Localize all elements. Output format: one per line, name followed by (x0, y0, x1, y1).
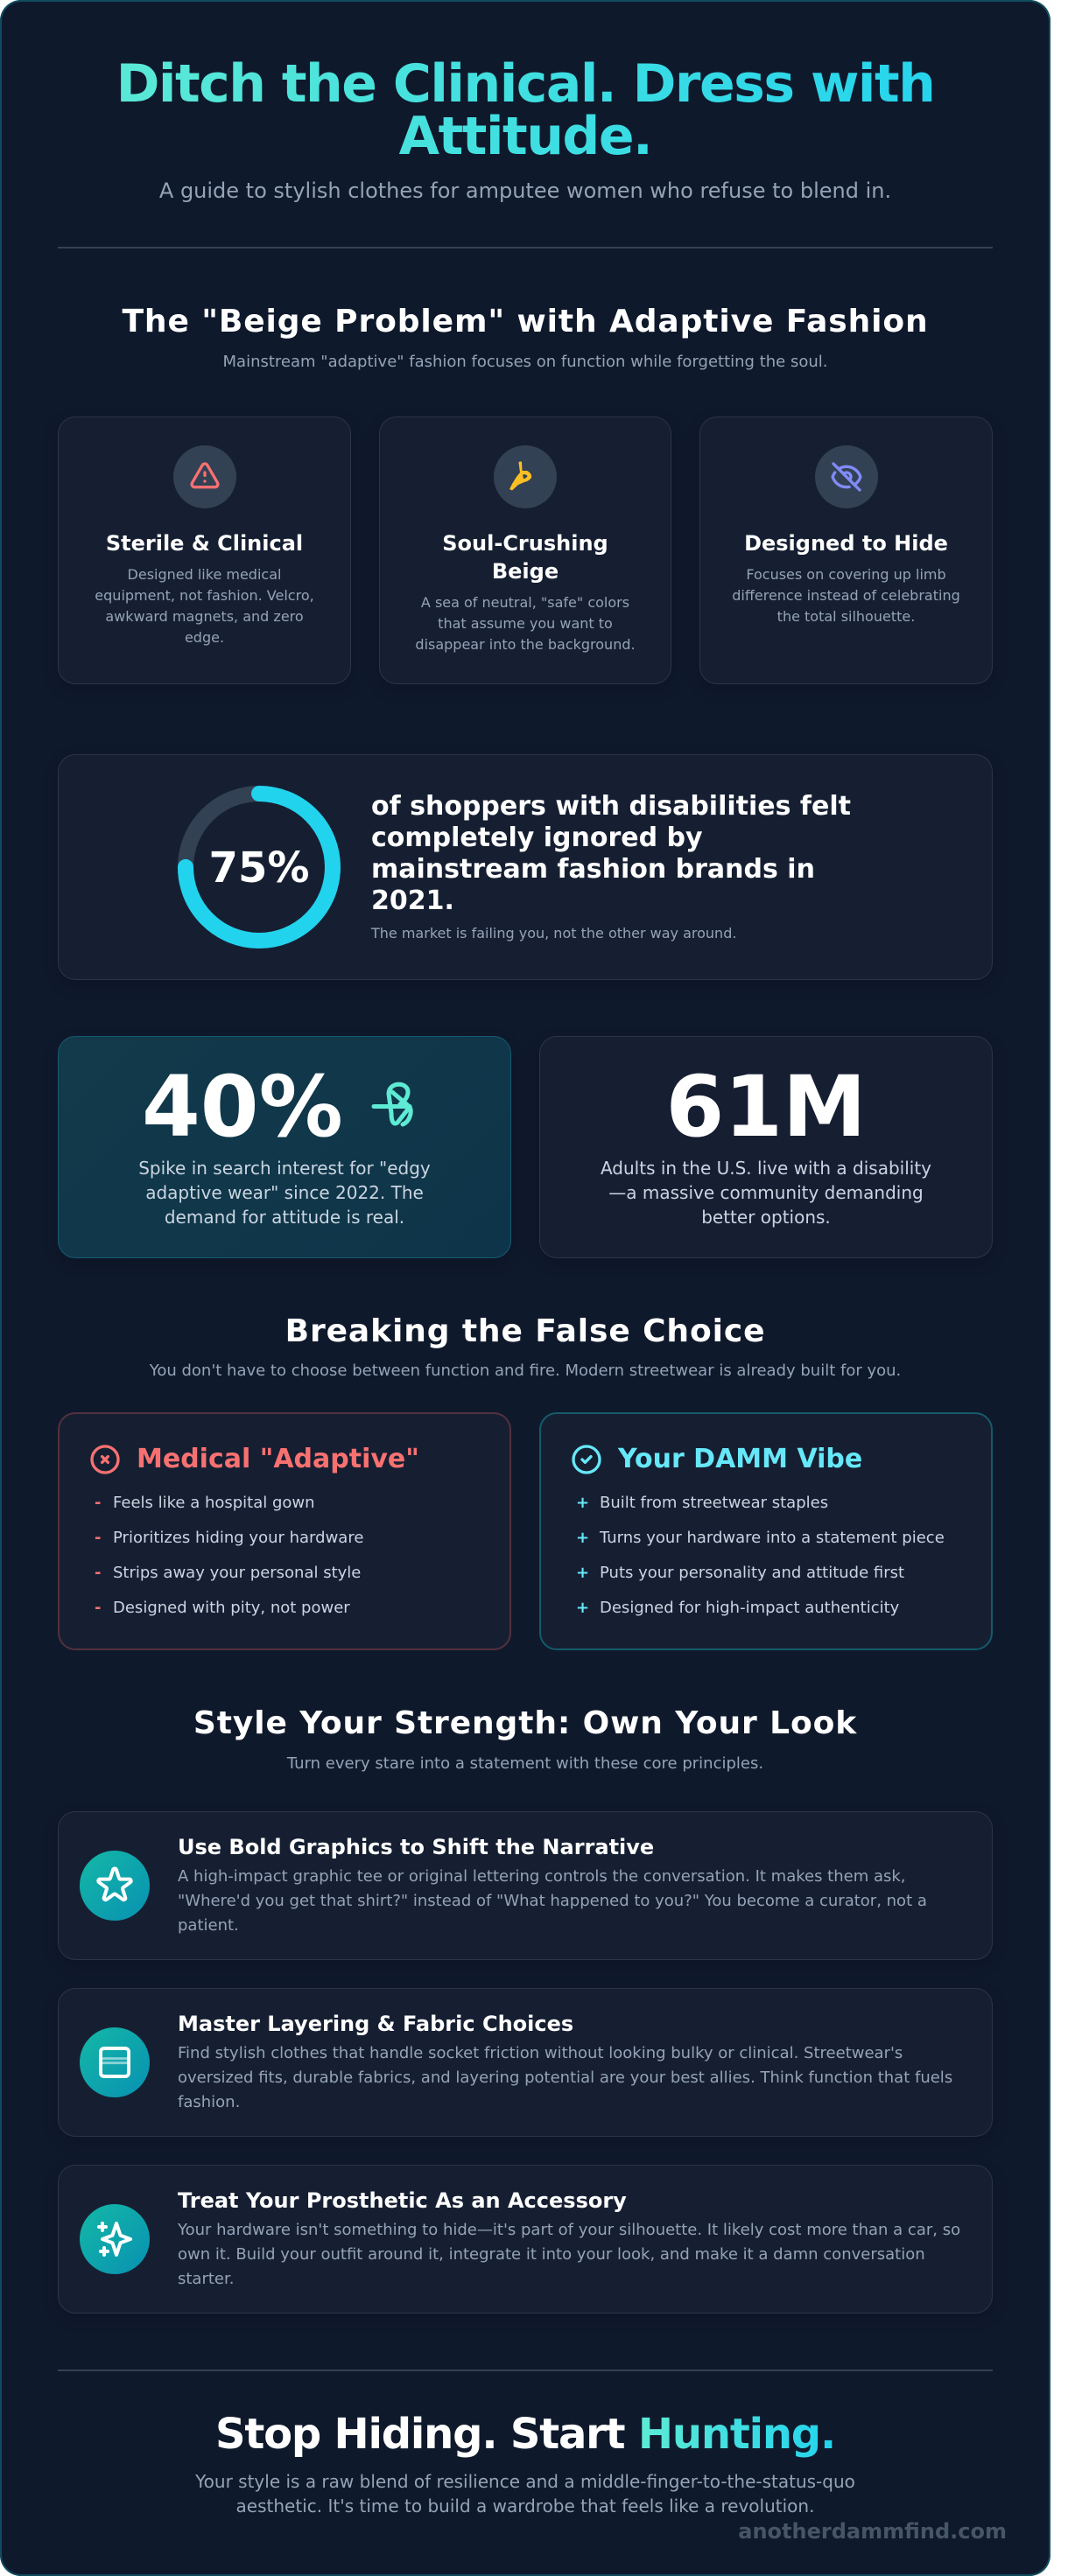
panel: bold graphics (58, 1811, 993, 1960)
card text: own it. Build your outfit around it, integrate it into your look, and make it a damn conversation (178, 2245, 925, 2264)
panel: 75 percent stat (58, 754, 993, 980)
icon: x circle (90, 1445, 120, 1474)
list of drawbacks: Feels like a hospital gown (113, 1494, 315, 1512)
list of benefits: Built from streetwear staples (600, 1494, 828, 1512)
list of drawbacks: - (95, 1529, 101, 1547)
list of benefits: Designed for high-impact authenticity (600, 1599, 899, 1617)
closing text: Your style is a raw blend of resilience and a middle-finger-to-the-status-quo (195, 2471, 855, 2492)
stat text: Adults in the U.S. live with a disability (601, 1158, 931, 1179)
card title: Sterile & Clinical (106, 531, 303, 556)
stat text: Spike in search interest for "edgy (138, 1158, 431, 1179)
card text: starter. (178, 2270, 234, 2288)
icon: layered panel (80, 2027, 150, 2097)
section intro: beige problem: Mainstream "adaptive" fashion focuses on function while forgetting the soul. (223, 353, 827, 371)
list of benefits: + (576, 1564, 589, 1582)
panel: designed to hide (699, 416, 993, 684)
subtitle: A guide to stylish clothes for amputee women who refuse to blend in. (159, 178, 891, 203)
card text: disappear into the background. (415, 636, 636, 653)
card text: awkward magnets, and zero (105, 608, 304, 625)
card title (442, 531, 608, 584)
stat text: better options. (701, 1207, 831, 1228)
card title: Master Layering & Fabric Choices (178, 2012, 573, 2036)
list of benefits: Turns your hardware into a statement piece (600, 1529, 945, 1547)
donut chart: 75% (178, 786, 341, 948)
card title: Use Bold Graphics to Shift the Narrative (178, 1835, 654, 1859)
card title: Soul-Crushing (442, 531, 608, 556)
stat text (138, 1158, 431, 1228)
section intro: false choice: You don't have to choose between function and fire. Modern streetwear is already built for you. (150, 1362, 901, 1380)
stat text: —a massive community demanding (608, 1182, 924, 1203)
card text: equipment, not fashion. Velcro, (95, 587, 314, 604)
column title: Your DAMM Vibe (618, 1444, 862, 1474)
stat note: The market is failing you, not the other way around. (371, 925, 736, 942)
card text: A sea of neutral, "safe" colors (421, 594, 629, 611)
title (58, 58, 993, 163)
card text (732, 566, 960, 625)
list of benefits: + (576, 1599, 589, 1617)
stat statement (371, 791, 851, 916)
closing text (195, 2471, 855, 2516)
card text: the total silhouette. (777, 608, 915, 625)
card text (415, 594, 636, 653)
list of drawbacks: - (95, 1564, 101, 1582)
list of benefits: Puts your personality and attitude first (600, 1564, 904, 1582)
icon: tangled trend arrow (371, 1082, 413, 1127)
list of benefits: + (576, 1494, 589, 1512)
panel: sterile and clinical (58, 416, 351, 684)
panel: prosthetic as accessory (58, 2165, 993, 2314)
panel: soul-crushing beige (379, 416, 671, 684)
stat statement: of shoppers with disabilities felt (371, 791, 851, 822)
card text: "Where'd you get that shirt?" instead of "What happened to you?" You become a curator, not a (178, 1892, 927, 1910)
card text: edge. (185, 629, 224, 646)
list of benefits: + (576, 1529, 589, 1547)
card title: Designed to Hide (744, 531, 948, 556)
panel: 61M stat (539, 1036, 993, 1258)
card text: Your hardware isn't something to hide—it's part of your silhouette. It likely cost more than a car, so (178, 2221, 960, 2239)
card title: Beige (492, 559, 559, 584)
list of drawbacks: Designed with pity, not power (113, 1599, 350, 1617)
card text: Find stylish clothes that handle socket friction without looking bulky or clinical. Streetwear's (178, 2044, 903, 2062)
panel: your damm vibe (539, 1412, 993, 1650)
card text (178, 1867, 927, 1935)
big number: 61M: 61M (665, 1058, 867, 1156)
panel: medical adaptive (58, 1412, 511, 1650)
icon: check circle (572, 1445, 601, 1474)
watermark: anotherdammfind.com (738, 2519, 1007, 2544)
list of drawbacks: Prioritizes hiding your hardware (113, 1529, 363, 1547)
card text (178, 2221, 960, 2288)
icon: star (80, 1851, 150, 1921)
list of drawbacks: - (95, 1599, 101, 1617)
card text (178, 2044, 952, 2111)
stat statement: mainstream fashion brands in (371, 854, 815, 885)
card text: fashion. (178, 2093, 240, 2111)
closing text: aesthetic. It's time to build a wardrobe that feels like a revolution. (236, 2496, 814, 2516)
stat text (601, 1158, 931, 1228)
card text: Designed like medical (128, 566, 281, 583)
card title: Treat Your Prosthetic As an Accessory (178, 2188, 627, 2213)
panel: layering and fabric (58, 1988, 993, 2137)
list of benefits (576, 1494, 945, 1617)
icon: warning triangle (173, 445, 236, 508)
stat text: demand for attitude is real. (165, 1207, 404, 1228)
card text: oversized fits, durable fabrics, and layering potential are your best allies. Think function that fuels (178, 2068, 952, 2087)
stat statement: completely ignored by (371, 822, 703, 853)
heading: beige problem: The "Beige Problem" with Adaptive Fashion (122, 304, 929, 340)
list of drawbacks (95, 1494, 363, 1617)
card text: that assume you want to (438, 615, 613, 632)
card text: difference instead of celebrating (732, 587, 960, 604)
big number: 40%: 40% (142, 1058, 343, 1156)
section intro: style your strength: Turn every stare into a statement with these core principles. (287, 1754, 763, 1773)
card text: Focuses on covering up limb (746, 566, 946, 583)
donut value: 75% (209, 844, 309, 892)
list of drawbacks: - (95, 1494, 101, 1512)
panel: 40 percent stat (58, 1036, 511, 1258)
title: Attitude. (399, 106, 651, 167)
heading: style your strength: Style Your Strength: Own Your Look (193, 1705, 857, 1741)
card text: A high-impact graphic tee or original lettering controls the conversation. It makes them ask, (178, 1867, 906, 1886)
card text: patient. (178, 1916, 239, 1935)
stat statement: 2021. (371, 886, 454, 916)
icon: eye off (814, 445, 877, 508)
icon: key shape (494, 445, 557, 508)
title: Ditch the Clinical. Dress with (116, 53, 934, 115)
column title: Medical "Adaptive" (137, 1444, 419, 1474)
card text (95, 566, 314, 646)
list of drawbacks: Strips away your personal style (113, 1564, 361, 1582)
closing headline: Stop Hiding. Start Hunting. (215, 2410, 835, 2459)
stat text: adaptive wear" since 2022. The (145, 1182, 424, 1203)
icon: sparkles (80, 2204, 150, 2274)
heading: false choice: Breaking the False Choice (285, 1313, 765, 1349)
